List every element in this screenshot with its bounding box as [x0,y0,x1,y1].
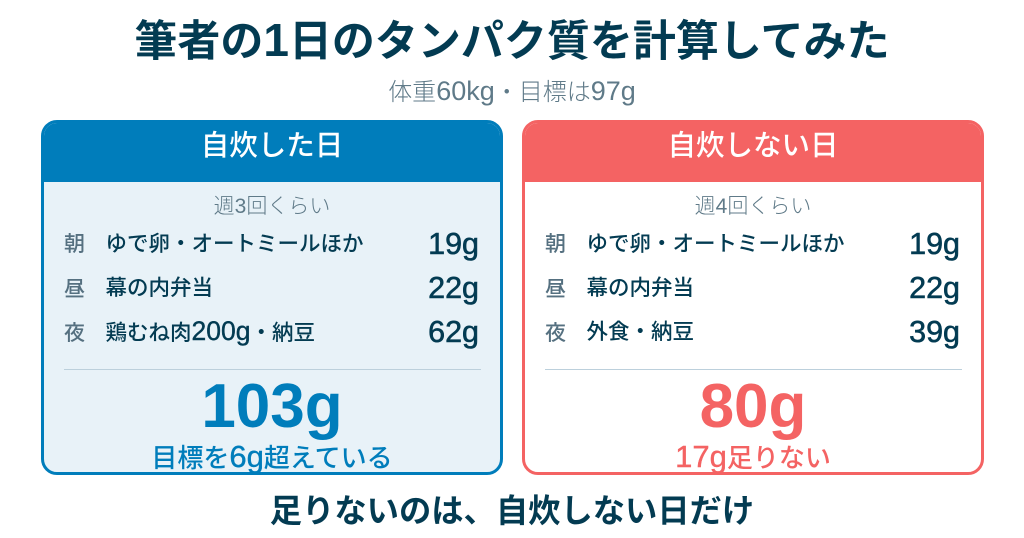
label: dinner: 夜 [545,322,566,345]
label: dinner: 夜 [64,322,85,345]
subtitle: 体重60kg・目標は97g [388,76,636,106]
grams: dinner: 39g [909,315,960,349]
total: 103g [201,372,343,441]
label: lunch: 昼 [545,278,566,301]
panel header: cooked days: 自炊した日 [201,130,343,162]
grams: breakfast: 19g [428,227,479,261]
food: breakfast: ゆで卵・オートミールほか [586,232,845,256]
panel header: cooked days [41,120,503,182]
panel: cooked days [41,120,503,475]
total: 80g [700,372,806,441]
frequency: 週4回くらい [695,195,811,218]
title: 筆者の1日のタンパク質を計算してみた [134,14,890,66]
label: breakfast: 朝 [545,233,566,256]
food: dinner: 鶏むね肉200g・納豆 [106,316,315,346]
food: breakfast: ゆで卵・オートミールほか [106,232,364,256]
label: breakfast: 朝 [64,233,85,256]
label: lunch: 昼 [64,278,85,301]
panel header: non-cooked days: 自炊しない日 [667,130,838,162]
grams: lunch: 22g [909,271,960,305]
food: lunch: 幕の内弁当 [586,276,694,300]
result note: 17g足りない [675,439,831,474]
food: dinner: 外食・納豆 [586,320,694,344]
grams: breakfast: 19g [909,227,960,261]
panel header: non-cooked days [522,120,984,182]
panel: non-cooked days [522,120,984,475]
frequency: 週3回くらい [214,195,330,218]
grams: dinner: 62g [428,315,479,349]
grams: lunch: 22g [428,271,479,305]
food: lunch: 幕の内弁当 [106,276,213,300]
result note: 目標を6g超えている [151,439,393,474]
conclusion: 足りないのは、自炊しない日だけ [270,493,754,529]
